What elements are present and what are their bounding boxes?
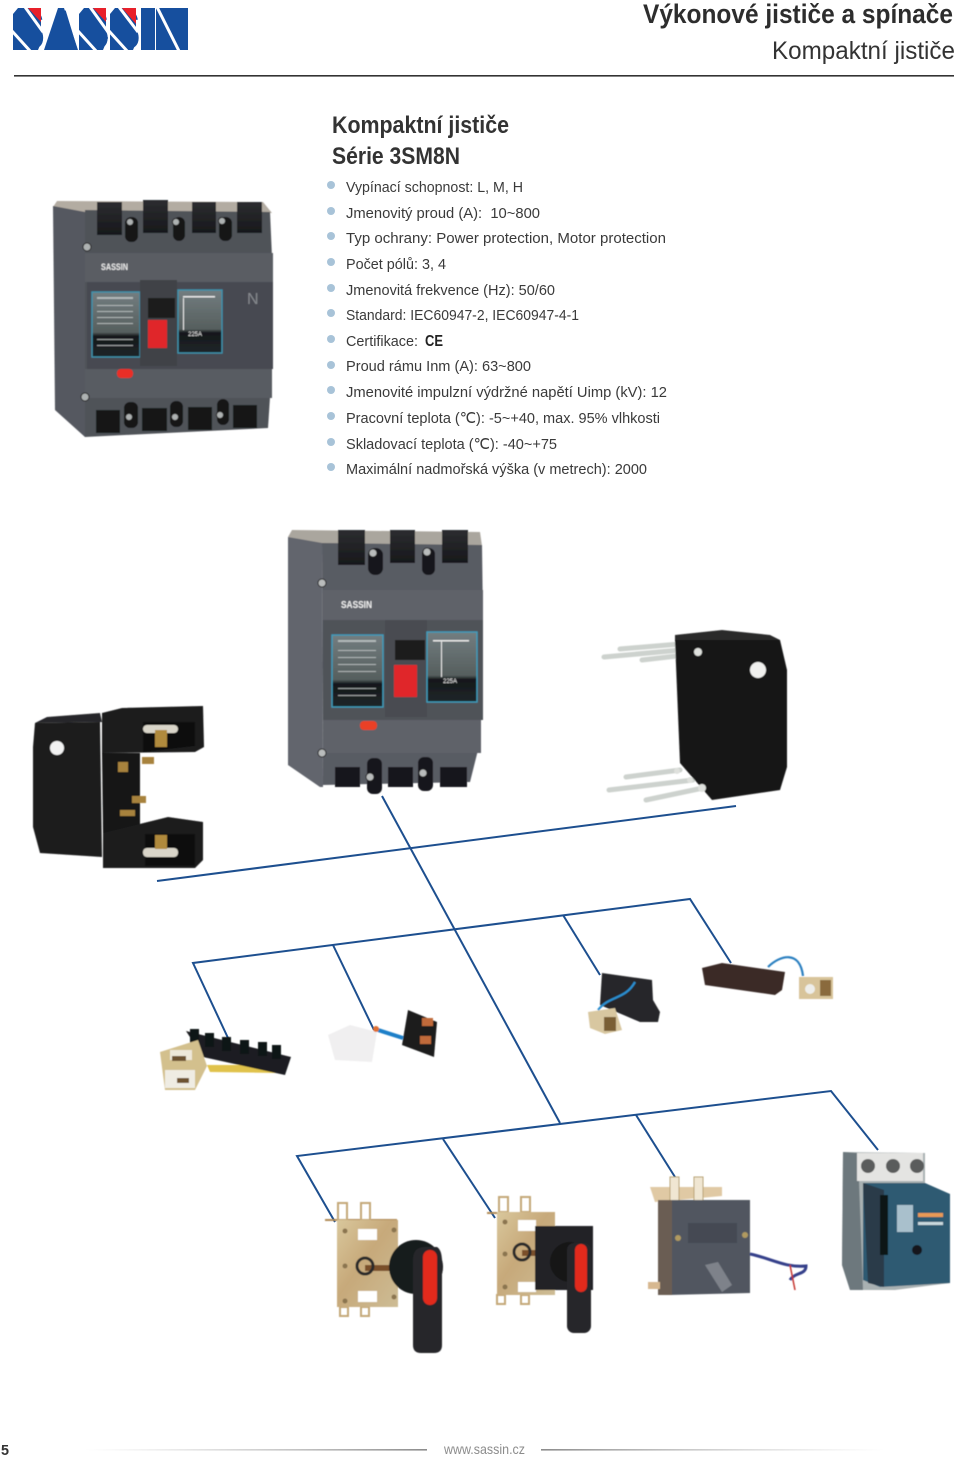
product photo: rear connection, right	[604, 630, 787, 800]
product photo: three-pole breaker: 225A	[443, 679, 457, 685]
accessory: contact block with blue wire	[588, 973, 660, 1034]
product photo: four-pole breaker	[53, 200, 273, 437]
accessory: auxiliary contact with comb, left	[160, 1029, 291, 1090]
product photo: three-pole breaker: SASSIN	[341, 600, 372, 611]
specification list: Počet pólů: 3, 4	[346, 256, 446, 273]
accessory: terminal strip with blue wire	[702, 957, 833, 999]
accessory: white contact with wire	[328, 1010, 437, 1062]
specification list: Pracovní teplota (℃): -5~+40, max. 95% vlhkosti	[346, 410, 660, 427]
product photo: four-pole breaker: N	[247, 291, 259, 308]
specification list: Maximální nadmořská výška (v metrech): 2000	[346, 461, 647, 478]
specification list	[327, 179, 667, 478]
product photo: three-pole breaker	[288, 530, 483, 794]
accessory: rotary handle with square base	[487, 1197, 593, 1333]
page title	[643, 0, 955, 65]
specification list: CE	[425, 333, 443, 350]
specification list: Vypínací schopnost: L, M, H	[346, 179, 523, 196]
product photo: four-pole breaker: 225A	[188, 332, 202, 338]
product heading: Série 3SM8N	[332, 143, 460, 170]
product heading	[332, 112, 509, 170]
product photo: rear connection, left	[33, 706, 204, 868]
specification list: Certifikace:	[346, 333, 418, 350]
accessory: blue residual current module	[842, 1152, 950, 1290]
accessory: rotary handle with round base	[325, 1203, 443, 1353]
specification list: Standard: IEC60947-2, IEC60947-4-1	[346, 307, 579, 324]
footer: www.sassin.cz	[443, 1441, 525, 1457]
specification list: Jmenovitá frekvence (Hz): 50/60	[346, 282, 555, 299]
specification list: Skladovací teplota (℃): -40~+75	[346, 436, 557, 453]
connector lines	[157, 796, 878, 1222]
product photo: four-pole breaker: SASSIN	[101, 262, 128, 272]
specification list: Proud rámu Inm (A): 63~800	[346, 358, 531, 375]
specification list: Typ ochrany: Power protection, Motor protection	[346, 230, 666, 247]
specification list: Jmenovitý proud (A): 10~800	[346, 205, 540, 222]
page title: Kompaktní jističe	[772, 37, 955, 65]
specification list: Jmenovité impulzní výdržné napětí Uimp (kV): 12	[346, 384, 667, 401]
footer	[1, 1441, 885, 1457]
accessory: motor operator	[648, 1177, 806, 1295]
product heading: Kompaktní jističe	[332, 112, 509, 139]
